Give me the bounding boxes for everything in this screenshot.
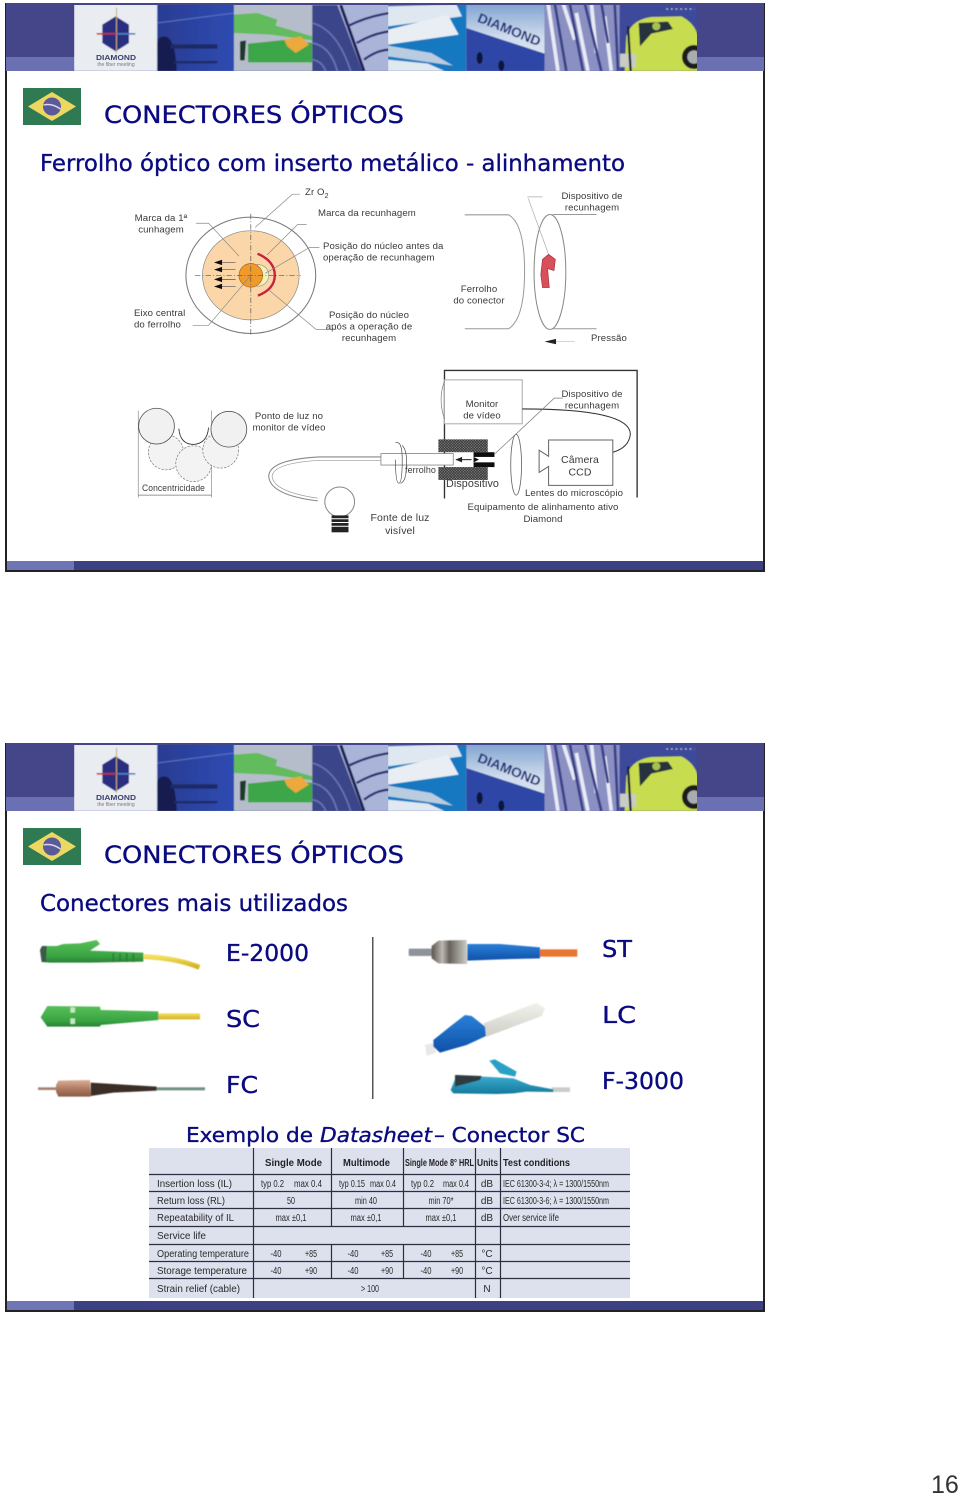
connector: SC	[41, 1006, 260, 1033]
heading: datasheet example: – Conector SC	[434, 1123, 585, 1147]
heading: datasheet example: Datasheet	[320, 1123, 433, 1147]
connector: E-2000	[40, 940, 309, 967]
table header row: Test conditions	[503, 1158, 570, 1169]
label: core after: após a operação de	[326, 322, 412, 332]
table values: min 70*	[428, 1196, 454, 1207]
table values: max ±0,1	[426, 1213, 457, 1224]
label: video monitor: Monitor	[466, 399, 498, 410]
table values: IEC 61300-3-4; λ = 1300/1550nm	[503, 1179, 609, 1190]
table values: typ 0.2	[411, 1179, 434, 1190]
label: central axis: Eixo central	[134, 308, 185, 319]
connector: FC	[38, 1073, 258, 1099]
heading: most used connectors: Conectores mais utilizados	[40, 891, 348, 917]
table values: +85	[305, 1249, 317, 1260]
connector: LC: LC	[602, 1003, 636, 1029]
table values: -40	[348, 1249, 359, 1260]
label: crimp device: Dispositivo de	[561, 191, 623, 202]
table values: IEC 61300-3-6; λ = 1300/1550nm	[503, 1196, 609, 1207]
table values: +90	[451, 1266, 463, 1277]
diagram: active alignment equipment	[269, 370, 637, 537]
label: visible light source: visível	[385, 525, 415, 537]
connector: LC	[425, 1003, 636, 1056]
label: first crimp mark: Marca da 1ª	[135, 213, 187, 224]
connector: FC: FC	[226, 1073, 258, 1099]
connector: E-2000: E-2000	[226, 941, 309, 967]
table values: max 0.4	[370, 1179, 396, 1190]
table values: max ±0,1	[350, 1213, 382, 1224]
label: crimp device: recunhagem	[565, 202, 619, 214]
diagram: concentricity circles	[138, 408, 326, 497]
label: microscope lens: Lentes do microscópio	[525, 488, 623, 499]
table values: °C	[481, 1266, 493, 1277]
table: SC connector datasheet	[149, 1148, 630, 1298]
table row labels: Strain relief (cable)	[157, 1284, 240, 1295]
table values: N	[483, 1284, 491, 1295]
table header row: Multimode	[343, 1158, 390, 1169]
table row labels: Return loss (RL)	[157, 1196, 225, 1207]
table values: -40	[420, 1266, 432, 1277]
heading: datasheet example: Exemplo de	[186, 1123, 313, 1147]
label: core before: operação de recunhagem	[323, 252, 435, 264]
table row labels: Service life	[157, 1231, 206, 1242]
table values: > 100	[361, 1284, 379, 1295]
label: concentricity: Concentricidade	[142, 483, 205, 494]
label: central axis: do ferrolho	[134, 320, 181, 330]
banner: photo strip with Diamond logo	[6, 3, 764, 71]
label: light spot: monitor de vídeo	[252, 422, 326, 434]
table values: dB	[481, 1196, 493, 1207]
label: CCD camera: CCD	[568, 466, 592, 478]
table row labels: Storage temperature	[157, 1266, 247, 1277]
table values: min 40	[355, 1196, 377, 1207]
table values: max ±0,1	[276, 1213, 307, 1224]
label: crimp device: Dispositivo de	[561, 389, 623, 400]
table values: typ 0.15	[339, 1179, 365, 1190]
table values: °C	[481, 1249, 493, 1260]
table header row	[265, 1158, 570, 1169]
heading: datasheet example	[186, 1123, 585, 1147]
connector: ST: ST	[602, 937, 633, 963]
label: ferrule: ferrolho	[405, 465, 436, 476]
table values: +85	[381, 1249, 393, 1260]
label: device: Dispositivo	[446, 478, 499, 490]
label: pressure: Pressão	[591, 333, 627, 344]
label: first crimp mark: cunhagem	[138, 224, 184, 236]
divider between connector columns	[372, 937, 374, 1099]
table values: 50	[287, 1196, 295, 1207]
table row labels	[157, 1179, 249, 1295]
label: active alignment equipment: Diamond	[523, 514, 563, 525]
table values: -40	[348, 1266, 359, 1277]
table row labels: Repeatability of IL	[157, 1213, 234, 1224]
icon: Brazilian flag	[23, 828, 81, 865]
label: active alignment equipment: Equipamento de alinhamento ativo	[468, 502, 618, 513]
label: connector ferrule: Ferrolho	[461, 284, 497, 295]
connector: F-3000: F-3000	[602, 1069, 684, 1095]
label: connector ferrule: do conector	[453, 296, 505, 306]
title: CONECTORES ÓPTICOS	[104, 839, 404, 869]
table values: max 0.4	[294, 1179, 322, 1190]
label: ZrO2: Zr O	[305, 187, 325, 198]
label: core after: Posição do núcleo	[329, 310, 409, 321]
table values: dB	[481, 1213, 493, 1224]
diagram: ferrule cross-section	[134, 187, 444, 344]
label: re-crimp mark: Marca da recunhagem	[318, 208, 416, 219]
table header row: Single Mode 8° HRL	[405, 1158, 474, 1169]
table values: dB	[481, 1179, 493, 1190]
label: video monitor: de vídeo	[463, 410, 501, 422]
footer bar	[7, 1301, 763, 1310]
table values	[261, 1179, 609, 1295]
footer bar	[7, 561, 763, 570]
label: crimp device: recunhagem	[565, 400, 619, 412]
label: light spot: Ponto de luz no	[255, 411, 323, 422]
title: CONECTORES ÓPTICOS	[104, 99, 404, 129]
panel: slide 2	[6, 743, 764, 1311]
table row labels: Operating temperature	[157, 1249, 249, 1260]
table header row: Single Mode	[265, 1158, 322, 1169]
table values: -40	[270, 1249, 282, 1260]
label: CCD camera: Câmera	[561, 454, 599, 466]
banner: photo strip with Diamond logo	[6, 743, 764, 811]
label: visible light source: Fonte de luz	[370, 512, 430, 524]
table values: Over service life	[503, 1213, 559, 1224]
table values: +90	[381, 1266, 393, 1277]
connector: SC: SC	[226, 1007, 260, 1033]
table values: -40	[420, 1249, 432, 1260]
table row labels: Insertion loss (IL)	[157, 1179, 232, 1190]
label: core before: Posição do núcleo antes da	[323, 241, 443, 252]
icon: Brazilian flag	[23, 88, 81, 125]
table values: +90	[305, 1266, 317, 1277]
connector: ST	[409, 937, 633, 964]
connector: F-3000	[451, 1059, 684, 1095]
table values: +85	[451, 1249, 463, 1260]
heading: ferrule alignment: Ferrolho óptico com inserto metálico - alinhamento	[40, 151, 625, 177]
table header row: Units	[477, 1158, 498, 1169]
label: core after: recunhagem	[342, 333, 396, 344]
diagram: crimping device on ferrule	[453, 191, 627, 344]
table values: typ 0.2	[261, 1179, 284, 1190]
table values: max 0.4	[443, 1179, 469, 1190]
panel: slide 1	[6, 3, 764, 571]
table values: -40	[270, 1266, 282, 1277]
label: ZrO2: 2	[325, 193, 329, 200]
